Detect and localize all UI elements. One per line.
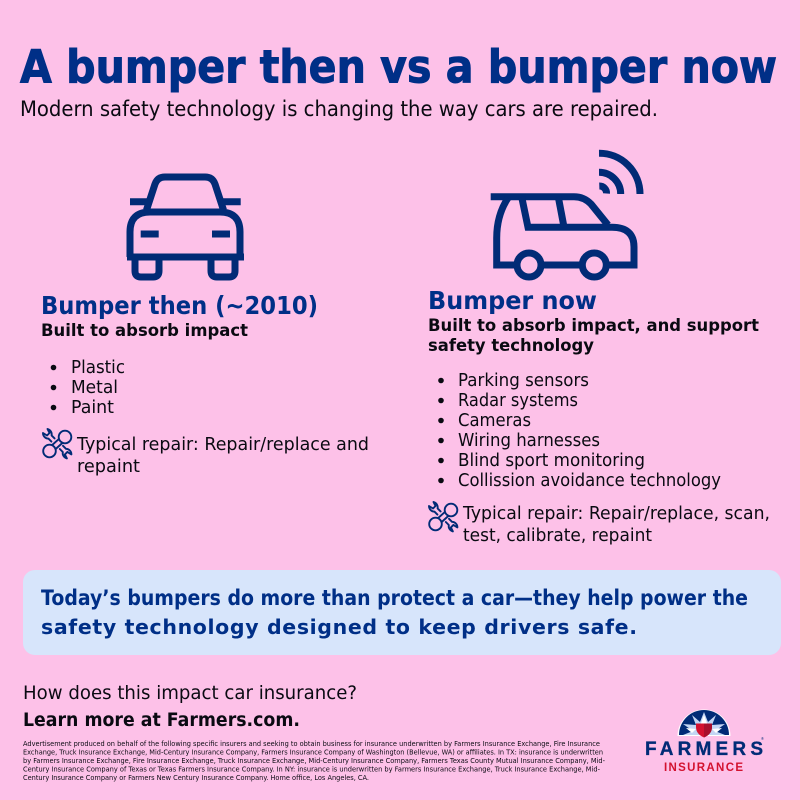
list: materials: Plastic xyxy=(71,357,125,378)
legal fine print: Advertisement produced on behalf of the following specific insurers and seeking to obtain business for insurance underwritten by Farmers Insurance Exchange, Fire Insurance xyxy=(23,739,600,748)
panel: bumper then xyxy=(41,177,369,477)
text: typical repair now: Typical repair: Repair/replace, scan, xyxy=(462,503,770,524)
text: typical repair now xyxy=(462,503,770,546)
subheading: built to absorb and support: safety technology xyxy=(428,336,594,356)
call to action: Learn more at Farmers.com. xyxy=(23,709,300,731)
legal fine print: Exchange, Truck Insurance Exchange, Mid-Century Insurance Company, Farmers Insurance Company of Washington (Bellevue, WA) or affiliates. In TX: insurance is underwritten xyxy=(23,748,603,756)
subheading: built to absorb and support xyxy=(428,316,759,356)
logo: Farmers Insurance: ® xyxy=(761,736,764,741)
list: components: Wiring harnesses xyxy=(458,430,600,451)
list: materials: Paint xyxy=(71,397,114,418)
legal fine print: Century Insurance Company or Farmers New Century Insurance Company. Home office, Los Angeles, CA. xyxy=(23,773,369,782)
icon: tools xyxy=(43,429,71,458)
subtitle: Modern safety technology is changing the way cars are repaired. xyxy=(20,97,658,122)
subheading: built to absorb impact: Built to absorb impact xyxy=(41,321,248,341)
list: components: Blind sport monitoring xyxy=(458,450,645,471)
list: components: Radar systems xyxy=(458,390,578,411)
callout xyxy=(23,570,781,655)
logo: Farmers Insurance: FARMERS xyxy=(645,739,763,760)
legal fine print: Century Insurance Company of Texas or Texas Farmers Insurance Company. In NY: insurance is underwritten by Farmers Insurance Exchange, Truck Insurance Exchange, Mid- xyxy=(23,764,600,774)
logo: Farmers Insurance: INSURANCE xyxy=(664,762,743,774)
legal fine print: by Farmers Insurance Exchange, Fire Insurance Exchange, Truck Insurance Exchange, Mid-Century Insurance Company, Farmers Texas County Mutual Insurance Company, Mid- xyxy=(23,756,605,765)
list: components: Parking sensors xyxy=(458,370,589,391)
icon: tools xyxy=(429,502,457,531)
text: typical repair then: Typical repair: Repair/replace and xyxy=(76,434,369,455)
list: components: Collission avoidance technology xyxy=(458,470,721,491)
legal fine print xyxy=(23,739,605,782)
text: typical repair now: test, calibrate, repaint xyxy=(463,525,652,546)
list: materials: Metal xyxy=(71,377,118,398)
text: typical repair then: repaint xyxy=(77,456,140,477)
logo: Farmers Insurance xyxy=(645,710,764,774)
list: components: Cameras xyxy=(458,410,531,431)
text: typical repair then xyxy=(76,434,369,477)
subheading: built to absorb and support: Built to absorb impact, and support xyxy=(428,316,759,336)
call to action: How does this impact car insurance? xyxy=(23,682,357,704)
call to action xyxy=(23,682,357,731)
icon: connected car xyxy=(491,153,640,277)
list: materials xyxy=(51,357,125,418)
heading: bumper now: Bumper now xyxy=(428,286,597,315)
panel: bumper now xyxy=(428,153,770,546)
icon: front view car xyxy=(127,177,244,277)
heading: bumper then: Bumper then (~2010) xyxy=(41,291,318,320)
list: components xyxy=(438,370,721,491)
callout: safety technology designed to keep drivers safe. xyxy=(41,615,637,639)
